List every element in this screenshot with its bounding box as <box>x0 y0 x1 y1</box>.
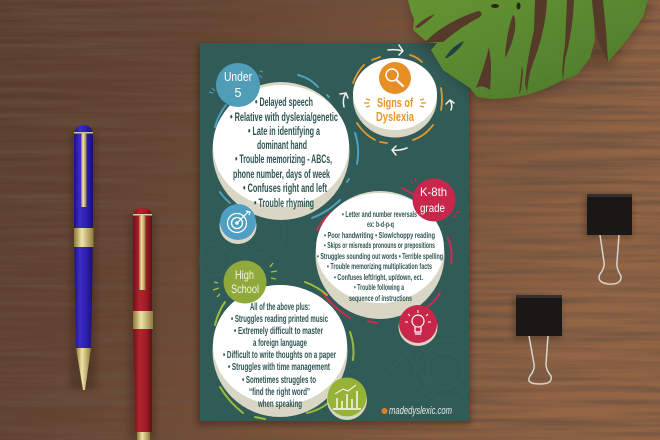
under 5 list text: • Confuses right and left <box>243 183 327 195</box>
card shadow <box>197 46 471 425</box>
K-8th list text: • Poor handwriting • Slow/choppy reading <box>324 230 435 240</box>
footer: website <box>382 405 452 417</box>
badge: Under 5: 5 <box>235 86 242 100</box>
icon: target <box>220 204 256 244</box>
high school list text: a foreign language <box>253 337 307 349</box>
high school list text: “find the right word” <box>249 386 310 398</box>
circle: signs of dyslexia <box>353 58 437 138</box>
K-8th list text: • Trouble memorizing multiplication facts <box>327 261 432 271</box>
icon: growth chart <box>327 378 367 420</box>
badge: High School: High <box>235 268 254 282</box>
title: signs of dyslexia: Signs of <box>377 95 413 110</box>
leaf shadow <box>408 0 650 102</box>
high school list text: • Difficult to write thoughts on a paper <box>223 349 336 361</box>
footer: website: madedyslexic.com <box>389 405 452 417</box>
under 5 list text: • Trouble memorizing - ABCs, <box>235 154 332 166</box>
badge: K-8th grade: K-8th <box>420 185 447 199</box>
badge: High School: School <box>231 282 259 296</box>
K-8th list text: • Struggles sounding out words • Terrible spelling <box>317 251 443 261</box>
badge: Under 5 <box>209 63 263 107</box>
binder clip: lower <box>513 295 562 384</box>
arrows around signs circle <box>340 45 454 155</box>
pen: blue <box>70 125 96 390</box>
under 5 list text: • Trouble rhyming <box>254 198 314 210</box>
leaf gaps <box>415 0 608 94</box>
decorative dashes: K-8th <box>317 188 452 323</box>
K-8th list text: • Confuses left/right, up/down, ect. <box>334 272 423 282</box>
under 5 list text: phone number, days of week <box>233 169 330 181</box>
icon: light bulb <box>398 305 438 346</box>
decorative dashes: signs <box>353 55 442 143</box>
title: signs of dyslexia <box>376 95 415 124</box>
under 5 list text: • Late in identifying a <box>248 126 320 138</box>
badge: Under 5: Under <box>224 70 252 84</box>
high school list text: • Struggles with time management <box>228 361 330 373</box>
icon: magnifying glass <box>379 62 411 94</box>
panel: teal card <box>199 43 475 440</box>
badge: K-8th grade: grade <box>420 201 445 215</box>
under 5 list text: • Delayed speech <box>255 97 313 109</box>
under 5 list text: • Relative with dyslexia/genetic <box>230 112 338 124</box>
monstera leaf <box>408 0 648 99</box>
high school list text: • Struggles reading printed music <box>231 313 328 325</box>
under 5 list text: dominant hand <box>257 140 307 152</box>
title: signs of dyslexia: Dyslexia <box>376 109 415 124</box>
circle: K-8th grade content <box>316 191 444 319</box>
under 5 list text <box>230 97 338 210</box>
binder clip: upper <box>584 194 632 284</box>
high school list text: • Extremely difficult to master <box>234 325 323 337</box>
circle: high school content <box>212 285 348 417</box>
badge: High School <box>213 260 277 304</box>
leaf hole over card <box>445 41 464 58</box>
high school list text: • Sometimes struggles to <box>242 374 316 386</box>
K-8th list text: • Skips or misreads pronouns or prepositions <box>324 240 435 250</box>
high school list text: All of the above plus: <box>250 301 310 313</box>
high school list text: when speaking <box>257 398 302 410</box>
decorative dashes: under 5 <box>215 75 358 218</box>
pen: red <box>129 208 155 440</box>
K-8th list text: ex: b-d-p-q <box>367 219 394 229</box>
badge: K-8th grade <box>411 178 460 222</box>
K-8th list text <box>317 209 443 303</box>
K-8th list text: • Trouble following a <box>354 282 404 292</box>
circle: under 5 content <box>212 82 350 220</box>
high school list text <box>223 301 336 410</box>
K-8th list text: • Letter and number reversals <box>342 209 417 219</box>
K-8th list text: sequence of instructions <box>349 293 412 303</box>
decorative dashes: high school <box>215 282 354 419</box>
